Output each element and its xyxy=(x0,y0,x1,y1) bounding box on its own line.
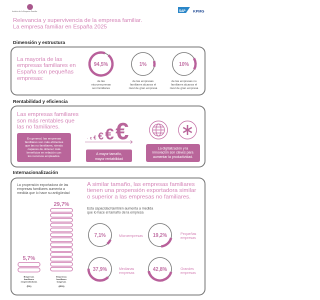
label: medianas: empresas xyxy=(119,271,135,275)
text block: capacidad xyxy=(87,206,153,214)
donut: pequeñas: 19,2% xyxy=(153,233,168,239)
icon: euros growing: € xyxy=(94,136,96,142)
caption: 10%: de las empresas no xyxy=(171,79,197,83)
icon: euros growing: € xyxy=(116,118,129,146)
donut: 10%: 10% xyxy=(179,62,190,68)
heading: rentabilidad: Rentabilidad y eficiencia xyxy=(13,99,68,104)
text block: mayoría: empresas: xyxy=(17,76,44,82)
text block: propensión: La propensión exportadora de las xyxy=(17,183,68,187)
caption: 1%: nivel de gran empresa xyxy=(129,86,158,90)
text block: mayoría xyxy=(17,57,76,82)
panel: internacionalización xyxy=(11,178,205,295)
donut: 94,5%: 94,5% xyxy=(94,62,109,68)
title: La empresa familiar en España 2025 xyxy=(13,24,107,30)
text block: propensión: empresas familiares aumenta a xyxy=(17,187,65,191)
title: Relevancia y supervivencia de la empresa familiar. xyxy=(13,18,143,24)
caption: microempresas: microempresas xyxy=(91,82,111,86)
arrow xyxy=(85,140,132,144)
donut: medianas: 37,9% xyxy=(93,267,108,273)
text block: capacidad: que lo hace el tamaño de la empresa xyxy=(87,210,144,214)
text block: capacidad: Esta capacidad también aumenta a medida xyxy=(87,206,153,210)
chart: propensión exportadora xyxy=(18,202,72,288)
text block: mayoría: La mayoría de las xyxy=(17,57,62,63)
text block: rentables xyxy=(17,112,79,130)
text block: propensión xyxy=(17,183,70,195)
icon: euros growing: € xyxy=(98,132,104,142)
panel: dimensión y estructura xyxy=(11,47,205,95)
label: microempresas: Microempresas xyxy=(119,234,143,238)
label: empresas longevas: familiares xyxy=(56,279,67,281)
donut: 1% xyxy=(129,50,157,78)
donut: microempresas: 7,1% xyxy=(94,233,106,239)
heading: internacionalización: Internacionalización xyxy=(13,170,58,175)
caption: 1%: familiares alcanza el xyxy=(130,82,156,86)
text block: similar tamaño xyxy=(87,182,196,200)
donut: medianas xyxy=(84,253,116,285)
donut: microempresas xyxy=(85,220,115,250)
callout: tamaño: mayor rentabilidad xyxy=(95,157,123,161)
chart: propensión exportadora: 29,7% xyxy=(54,202,69,208)
caption: microempresas xyxy=(91,79,111,90)
text block: propensión: medida que lo hace su antigüedad xyxy=(17,191,70,195)
text block: similar tamaño: A similar tamaño, las empresas familiares xyxy=(87,182,195,188)
icon: innovation xyxy=(178,121,196,139)
donut: grandes: 42,8% xyxy=(153,267,168,273)
callout: digitalización xyxy=(146,144,200,162)
label: empresas emprendedoras: Empresas xyxy=(24,276,35,278)
logo: SAP xyxy=(178,7,190,13)
icon: euros growing xyxy=(87,118,129,146)
caption: microempresas: de las xyxy=(97,79,105,83)
callout: recursos: En general, las empresas xyxy=(27,136,62,140)
heading: dimensión: Dimensión y estructura xyxy=(13,40,65,45)
label: empresas longevas: (45%) xyxy=(59,285,65,288)
label: pequeñas xyxy=(180,232,197,240)
label: pequeñas: Pequeñas xyxy=(180,232,197,236)
label: empresas longevas: Empresas xyxy=(56,276,68,278)
caption: 10%: familiares alcanza el xyxy=(171,82,197,86)
text block: mayoría: España son pequeñas xyxy=(17,70,74,76)
label: empresas longevas: longevas xyxy=(57,282,67,284)
callout: digitalización: La digitalización y la xyxy=(158,146,188,150)
label: grandes: Grandes xyxy=(180,267,194,271)
callout: digitalización: innovación son claves para xyxy=(153,151,194,155)
icon: euros growing: € xyxy=(90,136,92,140)
label: empresas emprendedoras: familiares xyxy=(24,279,35,281)
text block: similar tamaño: tienen una propensión exportadora similar xyxy=(87,188,196,194)
caption: 1% xyxy=(129,79,158,90)
text block: rentables: son más rentables que xyxy=(17,118,75,124)
text block: rentables: las no familiares. xyxy=(17,124,60,130)
callout: recursos: beneficios en relación con xyxy=(27,150,62,154)
label: empresas longevas xyxy=(56,276,68,288)
callout: recursos: familiares son más eficientes xyxy=(25,140,64,144)
donut: 1%: 1% xyxy=(139,62,147,68)
panel: rentabilidad y eficiencia xyxy=(11,106,205,167)
title xyxy=(13,18,143,30)
logo: institute xyxy=(12,4,38,13)
icon: euros growing: · xyxy=(87,136,88,140)
label: pequeñas: empresas xyxy=(180,236,196,240)
logo: institute: Instituto de la Empresa Familiar xyxy=(12,10,38,13)
label: grandes xyxy=(180,267,196,275)
icon: globe xyxy=(150,121,168,139)
label: medianas xyxy=(119,267,135,275)
donut: 94,5% xyxy=(85,48,117,80)
label: empresas emprendedoras: (5%) xyxy=(27,286,32,288)
callout: recursos: que las no familiares, siendo xyxy=(25,144,63,148)
chart: propensión exportadora: 5,7% xyxy=(23,256,35,262)
callout: recursos: capaces de obtener más xyxy=(28,147,61,151)
callout: tamaño: A mayor tamaño, xyxy=(96,152,122,156)
caption: microempresas: son familiares xyxy=(92,86,110,90)
text block: similar tamaño: o superior a las empresas no familiares. xyxy=(87,194,191,200)
caption: 10%: nivel de gran empresa xyxy=(170,86,199,90)
icon: euros growing: € xyxy=(105,126,114,144)
callout: digitalización: aumentar la productividad. xyxy=(153,155,193,159)
callout: recursos: los recursos empleados. xyxy=(28,154,60,158)
caption: 10% xyxy=(170,79,199,90)
caption: 1%: de las empresas xyxy=(132,79,154,83)
logo: KPMG: KPMG xyxy=(193,10,204,14)
label: empresas emprendedoras xyxy=(21,276,38,288)
donut: pequeñas xyxy=(146,221,174,249)
callout: tamaño xyxy=(86,150,132,162)
label: grandes: empresas xyxy=(180,271,196,275)
text block: rentables: Las empresas familiares xyxy=(17,112,79,118)
logo: SAP: SAP xyxy=(179,9,186,13)
donut: grandes xyxy=(146,255,174,283)
donut: 10% xyxy=(168,48,200,80)
label: medianas: Medianas xyxy=(119,267,134,271)
label: empresas emprendedoras: emprendedoras xyxy=(21,282,38,284)
callout: recursos xyxy=(17,133,71,162)
text block: mayoría: empresas familiares en xyxy=(17,63,76,69)
